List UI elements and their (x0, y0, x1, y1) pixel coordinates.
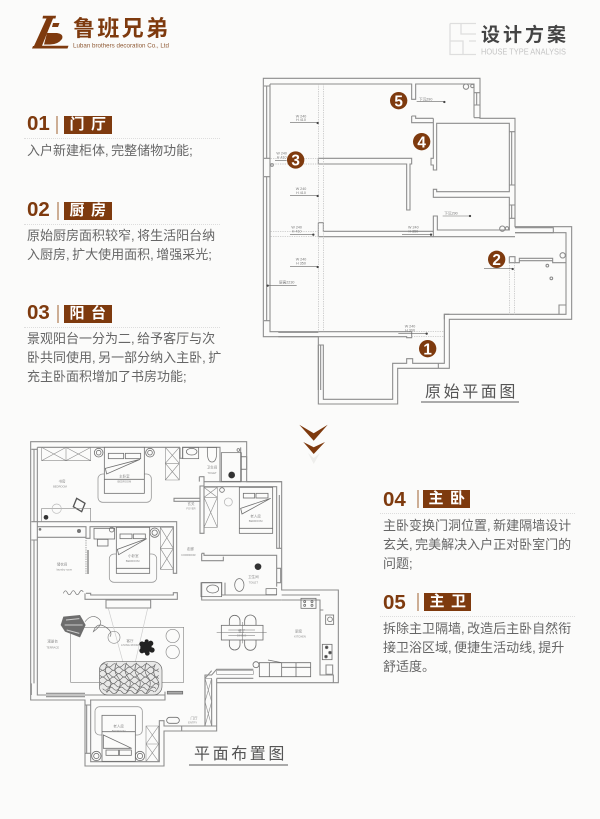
title: original plan: 原始平面图 (425, 384, 518, 401)
logo tagline: Luban brothers decoration Co., Ltd (73, 42, 169, 50)
text 04: 问题; (383, 556, 413, 570)
dimension annotations: H 410 (296, 118, 306, 122)
dimension annotations: W 240 (291, 226, 302, 230)
icon: armchair (61, 615, 86, 637)
room labels: KITCHEN (294, 634, 306, 638)
room labels: laundry room (57, 568, 73, 572)
room labels: TOILET (249, 580, 258, 584)
marker 5: 5 (394, 93, 403, 110)
dimension annotations: H 410 (296, 191, 306, 195)
panel: 03 balcony (24, 301, 221, 384)
text 05: 接卫浴区域,便捷生活动线,提升 (383, 640, 564, 654)
room labels: BEDROOM (53, 484, 67, 488)
number 04: 04 (383, 488, 406, 511)
text 04: 玄关,完美解决入户正对卧室门的 (383, 536, 571, 552)
label 门厅: 门厅 (70, 116, 112, 133)
number 01: 01 (27, 112, 50, 135)
room labels: DINING (237, 634, 246, 638)
heading: design plan (449, 23, 566, 56)
dimension annotations: H 410 (292, 230, 302, 234)
room labels: 玄关 (188, 501, 195, 506)
dimension annotations: W 240 (296, 187, 306, 191)
title: furnished plan: 平面布置图 (194, 746, 287, 763)
text 02: 入厨房,扩大使用面积,增强采光; (27, 247, 212, 262)
panel: 05 master bathroom (380, 591, 575, 674)
room labels: BEDROOM (112, 729, 126, 733)
dimension annotations: W 240 (405, 325, 415, 329)
number 05: 05 (383, 591, 406, 614)
room labels: BEDROOM (126, 559, 140, 563)
label 厨房: 厨房 (70, 202, 112, 219)
room labels: CORRIDOR (181, 553, 196, 557)
logo name: 鲁班兄弟 (73, 16, 168, 41)
room labels: BEDROOM (249, 519, 263, 523)
marker 2: 2 (492, 252, 501, 269)
marker 4: 4 (417, 134, 426, 151)
text 03: 卧共同使用,另一部分纳入主卧,扩 (27, 350, 221, 365)
dimension annotations: H 350 (296, 262, 306, 266)
dimension annotations: W 240 (408, 226, 419, 230)
room labels (46, 465, 306, 733)
room labels: LIVING ROOM (121, 643, 139, 647)
room labels: 老人房 (250, 513, 261, 518)
icon: small floor plan (450, 24, 476, 54)
icon: bathroom fixtures (183, 447, 277, 597)
text 03 (27, 331, 221, 384)
dimension annotations: 下沉290 (444, 211, 458, 216)
dimension annotations: W 240 (296, 258, 306, 262)
text 05 (383, 620, 571, 674)
room labels: 厨房 (295, 629, 303, 634)
number 02: 02 (27, 198, 50, 221)
icon: master bed (94, 447, 154, 502)
heading subtitle: HOUSE TYPE ANALYSIS (481, 48, 566, 56)
room labels: 观景台 (47, 639, 58, 644)
walls (31, 442, 338, 766)
room labels: 储衣间 (57, 561, 68, 566)
marker 3 (287, 151, 304, 170)
dimension annotations (266, 96, 514, 335)
icon: elder room bed (92, 707, 145, 761)
text 03: 充主卧面积增加了书房功能; (27, 369, 187, 384)
room labels: FOYER (186, 506, 196, 510)
icon: LB monogram (32, 16, 68, 48)
panel: 02 kitchen (24, 198, 220, 262)
room labels: TERRACE (46, 646, 59, 650)
marker 2 (488, 251, 505, 269)
text 04: 主卧变换门洞位置,新建隔墙设计 (383, 518, 571, 532)
heading text: 设计方案 (481, 23, 566, 46)
dimension annotations: 下沉290 (419, 96, 432, 101)
label 阳台: 阳台 (70, 305, 112, 322)
room labels: 客厅 (126, 638, 134, 643)
room labels: ENTRY (188, 720, 197, 724)
text 05: 拆除主卫隔墙,改造后主卧自然衔 (383, 620, 571, 636)
icon: kitchen counters and stove (167, 598, 334, 723)
text 01: 入户新建柜体,完整储物功能; (27, 143, 193, 158)
icon: patterned sofa (99, 662, 162, 695)
icon: living room TV cone and table (71, 608, 184, 682)
text 03: 景观阳台一分为二,给予客厅与次 (27, 331, 215, 346)
room labels: 书房 (58, 479, 66, 484)
dimension annotations: 层高2230 (279, 280, 294, 285)
icon: potted plants (39, 472, 261, 570)
text 02 (27, 228, 215, 262)
icon: second bed (220, 487, 273, 533)
room labels: BEDROOM (117, 480, 131, 484)
arrow: chevrons down (299, 424, 328, 464)
chart: furnished floor plan (30, 441, 339, 766)
room labels: 门厅 (190, 715, 198, 720)
marker 5 (390, 92, 407, 110)
room labels: 走廊 (187, 546, 194, 551)
logo: Luban brothers decoration (32, 16, 169, 50)
number 03: 03 (27, 301, 50, 324)
icon: dining table with chairs (217, 615, 267, 650)
marker 4 (413, 133, 430, 151)
room labels: TOILET (207, 471, 217, 475)
icon: study desk (42, 504, 91, 522)
icon: sliding door and curtain (63, 540, 88, 595)
icon: small bed (94, 527, 159, 582)
room labels: 小卧室 (128, 553, 139, 558)
dimension annotations: H 410 (277, 156, 287, 160)
panel: 01 entrance (24, 112, 220, 158)
chart: original floor plan (262, 78, 572, 404)
icon: wardrobes (42, 447, 253, 762)
marker 3: 3 (291, 153, 300, 170)
room labels: 老人房 (113, 723, 124, 728)
text 04 (383, 518, 571, 570)
dimension annotations: W 240 (296, 114, 306, 118)
dimension annotations: H 300 (405, 329, 415, 333)
room labels: 卫生间 (248, 574, 259, 579)
room labels: 主卧室 (119, 474, 130, 479)
marker 1 (419, 340, 436, 358)
dimension annotations: W 240 (276, 152, 287, 156)
room labels: 卫生间 (207, 465, 218, 470)
room labels: 餐厅 (238, 628, 246, 633)
icon: plant black (139, 639, 155, 656)
dimension annotations: H 350 (408, 230, 418, 234)
panel: 04 master bedroom (380, 488, 575, 570)
text 05: 舒适度。 (383, 658, 435, 674)
text 02: 原始厨房面积较窄,将生活阳台纳 (27, 228, 215, 243)
marker 1: 1 (423, 341, 432, 358)
